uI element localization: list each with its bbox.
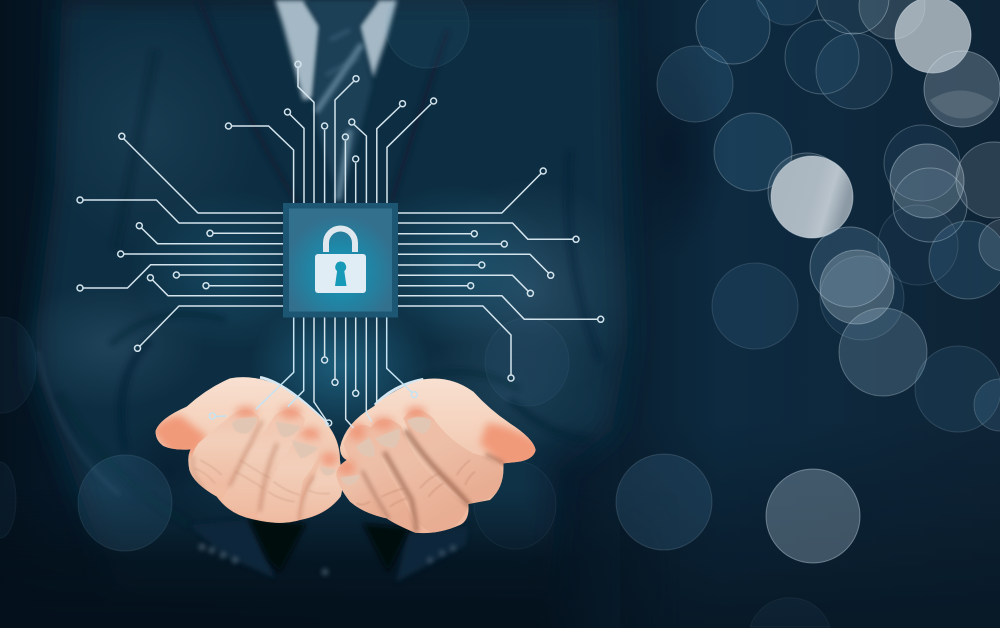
bottom traces <box>209 316 417 428</box>
index finger <box>192 411 260 458</box>
shirt and tie <box>275 0 397 205</box>
hand cuff highlights <box>260 377 423 425</box>
knuckle creases <box>357 460 475 507</box>
right traces <box>397 168 604 381</box>
chip outer <box>283 203 398 318</box>
bokeh lights right side <box>616 0 1000 627</box>
suit jacket <box>24 0 633 628</box>
fingertips <box>338 407 426 475</box>
background tone on right <box>610 40 1000 628</box>
ring finger <box>343 425 417 533</box>
chip with padlock <box>283 203 398 318</box>
left traces <box>77 133 284 351</box>
middle finger <box>368 419 468 535</box>
index finger <box>403 410 505 504</box>
middle finger <box>234 410 305 486</box>
faint bokeh lights on suit <box>0 0 569 551</box>
palm <box>156 377 342 523</box>
little finger <box>340 463 386 518</box>
top traces <box>226 61 437 204</box>
nails <box>341 417 431 485</box>
thumb tone <box>150 415 207 457</box>
ring finger <box>260 456 318 523</box>
chip inner <box>289 208 392 312</box>
sleeve highlight <box>38 350 120 495</box>
padlock icon <box>315 228 366 293</box>
knuckle creases <box>195 460 330 502</box>
suit tone patches <box>40 76 620 628</box>
circuit lines <box>77 61 604 428</box>
palm <box>336 378 536 533</box>
sleeve buttons <box>198 544 456 576</box>
jacket cuffs and shirt cuffs <box>190 518 468 582</box>
right hand <box>336 378 540 535</box>
little finger <box>300 466 342 520</box>
thumb tone <box>480 423 540 467</box>
left hand <box>150 377 343 523</box>
finger shadows <box>363 432 503 530</box>
fingertips <box>235 406 337 466</box>
suit lapel and fold creases <box>60 0 600 525</box>
finger shadows <box>193 422 313 520</box>
nails <box>232 417 336 476</box>
